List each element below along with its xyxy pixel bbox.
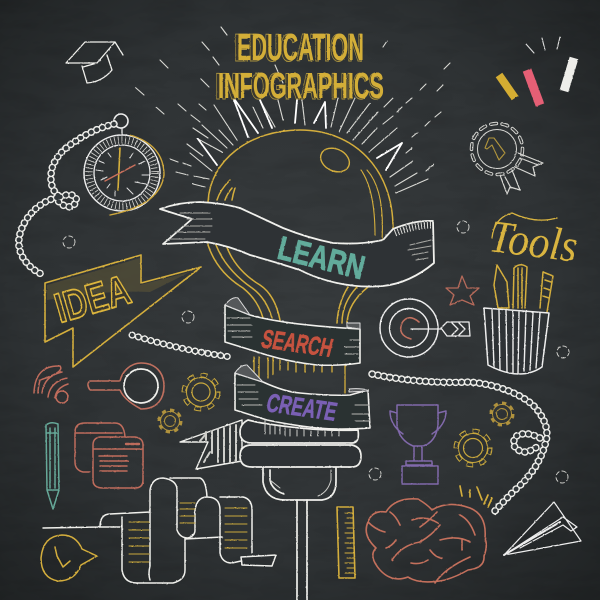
title: INFOGRAPHICS: [218, 65, 384, 106]
icon: large gear right: [456, 431, 490, 465]
icon: speech bubble clock: [41, 535, 97, 581]
title: INFOGRAPHICS: [215, 66, 383, 107]
icon: paper plane: [504, 502, 581, 555]
icon: graduation cap: [66, 42, 123, 83]
scroll ribbon: [43, 478, 276, 583]
icon: teal pencil: [46, 423, 59, 509]
ribbon tail and bulb base: [180, 420, 361, 600]
label: LEARN: LEARN: [274, 229, 369, 286]
icon: brain: [366, 499, 486, 583]
icon: white chalk: [564, 58, 574, 91]
icon: red star: [446, 276, 479, 305]
label: SEARCH: SEARCH: [259, 324, 336, 363]
icon: medal: [472, 124, 543, 194]
icon: pink chalk: [527, 70, 540, 105]
icon: pencil cup with tools: [484, 265, 553, 374]
icon: small gear: [159, 410, 181, 432]
icon: yellow chalk: [499, 75, 515, 98]
icon: magnifier: [88, 363, 164, 409]
banner: create: [235, 365, 370, 429]
label: CREATE: CREATE: [264, 388, 340, 427]
title: EDUCATION: [234, 27, 363, 70]
banner: learn: [160, 202, 434, 287]
chalk sparkle lines: [526, 37, 560, 53]
icon: wifi: [34, 366, 68, 403]
icon: yellow ruler: [337, 507, 355, 578]
icon: pocket watch: [84, 114, 164, 215]
sunburst rays: [136, 27, 450, 193]
watch chain: [19, 124, 114, 275]
chain: [372, 374, 547, 512]
chain: [132, 335, 231, 357]
small dashed circles: [63, 221, 569, 483]
idea arrow: [45, 255, 201, 367]
title: [215, 27, 384, 107]
icon: trophy: [390, 405, 446, 484]
light bulb: [207, 130, 393, 393]
banner: search: [225, 298, 360, 365]
icon: small gear right: [491, 403, 513, 425]
icon: brain idea sparks: [460, 486, 492, 507]
icon: browser windows: [75, 423, 143, 488]
label: IDEA: IDEA: [50, 266, 136, 332]
title: EDUCATION: [237, 27, 364, 69]
icon: large gear: [184, 375, 218, 409]
icon: target with dart: [380, 299, 470, 357]
heading: Tools: Tools: [487, 210, 580, 272]
